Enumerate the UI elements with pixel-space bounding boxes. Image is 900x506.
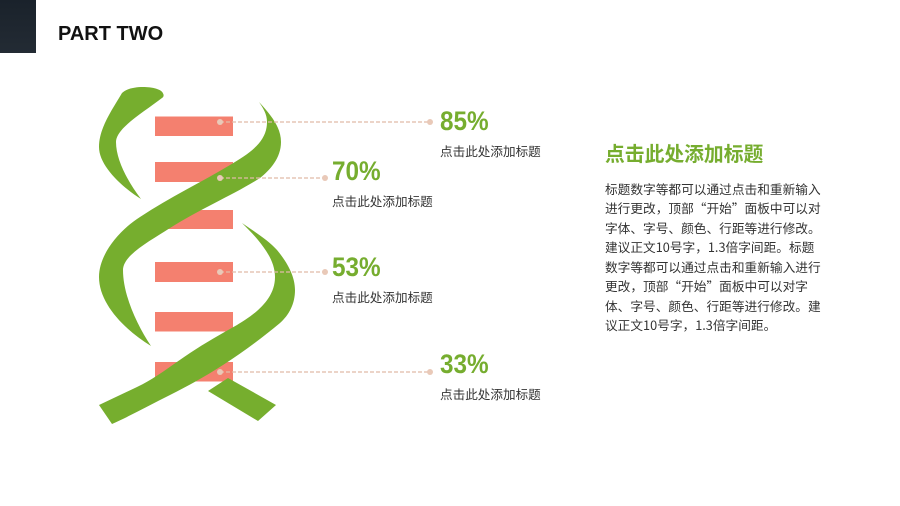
stat 33%: 33% bbox=[440, 349, 489, 379]
stat 70% bbox=[332, 156, 433, 209]
small leg bbox=[208, 378, 276, 421]
leader lines bbox=[220, 122, 430, 372]
stat 85%: 点击此处添加标题 bbox=[440, 145, 541, 159]
stat 33% bbox=[440, 349, 541, 402]
panel body text: 议正文10号字，1.3倍字间距。 bbox=[605, 315, 776, 334]
ribbon strands bbox=[99, 87, 295, 424]
stat 85% bbox=[440, 106, 541, 159]
stat 53%: 53% bbox=[332, 252, 381, 282]
stat 53% bbox=[332, 252, 433, 305]
panel body text: 更改，顶部“开始”面板中可以对字 bbox=[605, 276, 808, 295]
panel heading: 点击此处添加标题 bbox=[605, 144, 763, 166]
panel body text: 体、字号、颜色、行距等进行修改。建 bbox=[605, 296, 821, 315]
stat 85%: 85% bbox=[440, 106, 489, 136]
marker dots bbox=[217, 119, 433, 375]
panel body text bbox=[605, 179, 821, 334]
stat 70%: 点击此处添加标题 bbox=[332, 195, 433, 209]
panel body text: 数字等都可以通过点击和重新输入进行 bbox=[605, 257, 821, 276]
header block bbox=[0, 0, 36, 53]
panel body text: 字体、字号、颜色、行距等进行修改。 bbox=[605, 218, 821, 237]
stat 70%: 70% bbox=[332, 156, 381, 186]
stat 53%: 点击此处添加标题 bbox=[332, 291, 433, 305]
panel body text: 建议正文10号字，1.3倍字间距。标题 bbox=[605, 237, 814, 256]
panel body text: 进行更改，顶部“开始”面板中可以对 bbox=[605, 198, 821, 217]
panel body text: 标题数字等都可以通过点击和重新输入 bbox=[605, 179, 821, 198]
rung bars bbox=[155, 116, 233, 382]
title: PART TWO bbox=[58, 23, 163, 45]
stat 33%: 点击此处添加标题 bbox=[440, 388, 541, 402]
